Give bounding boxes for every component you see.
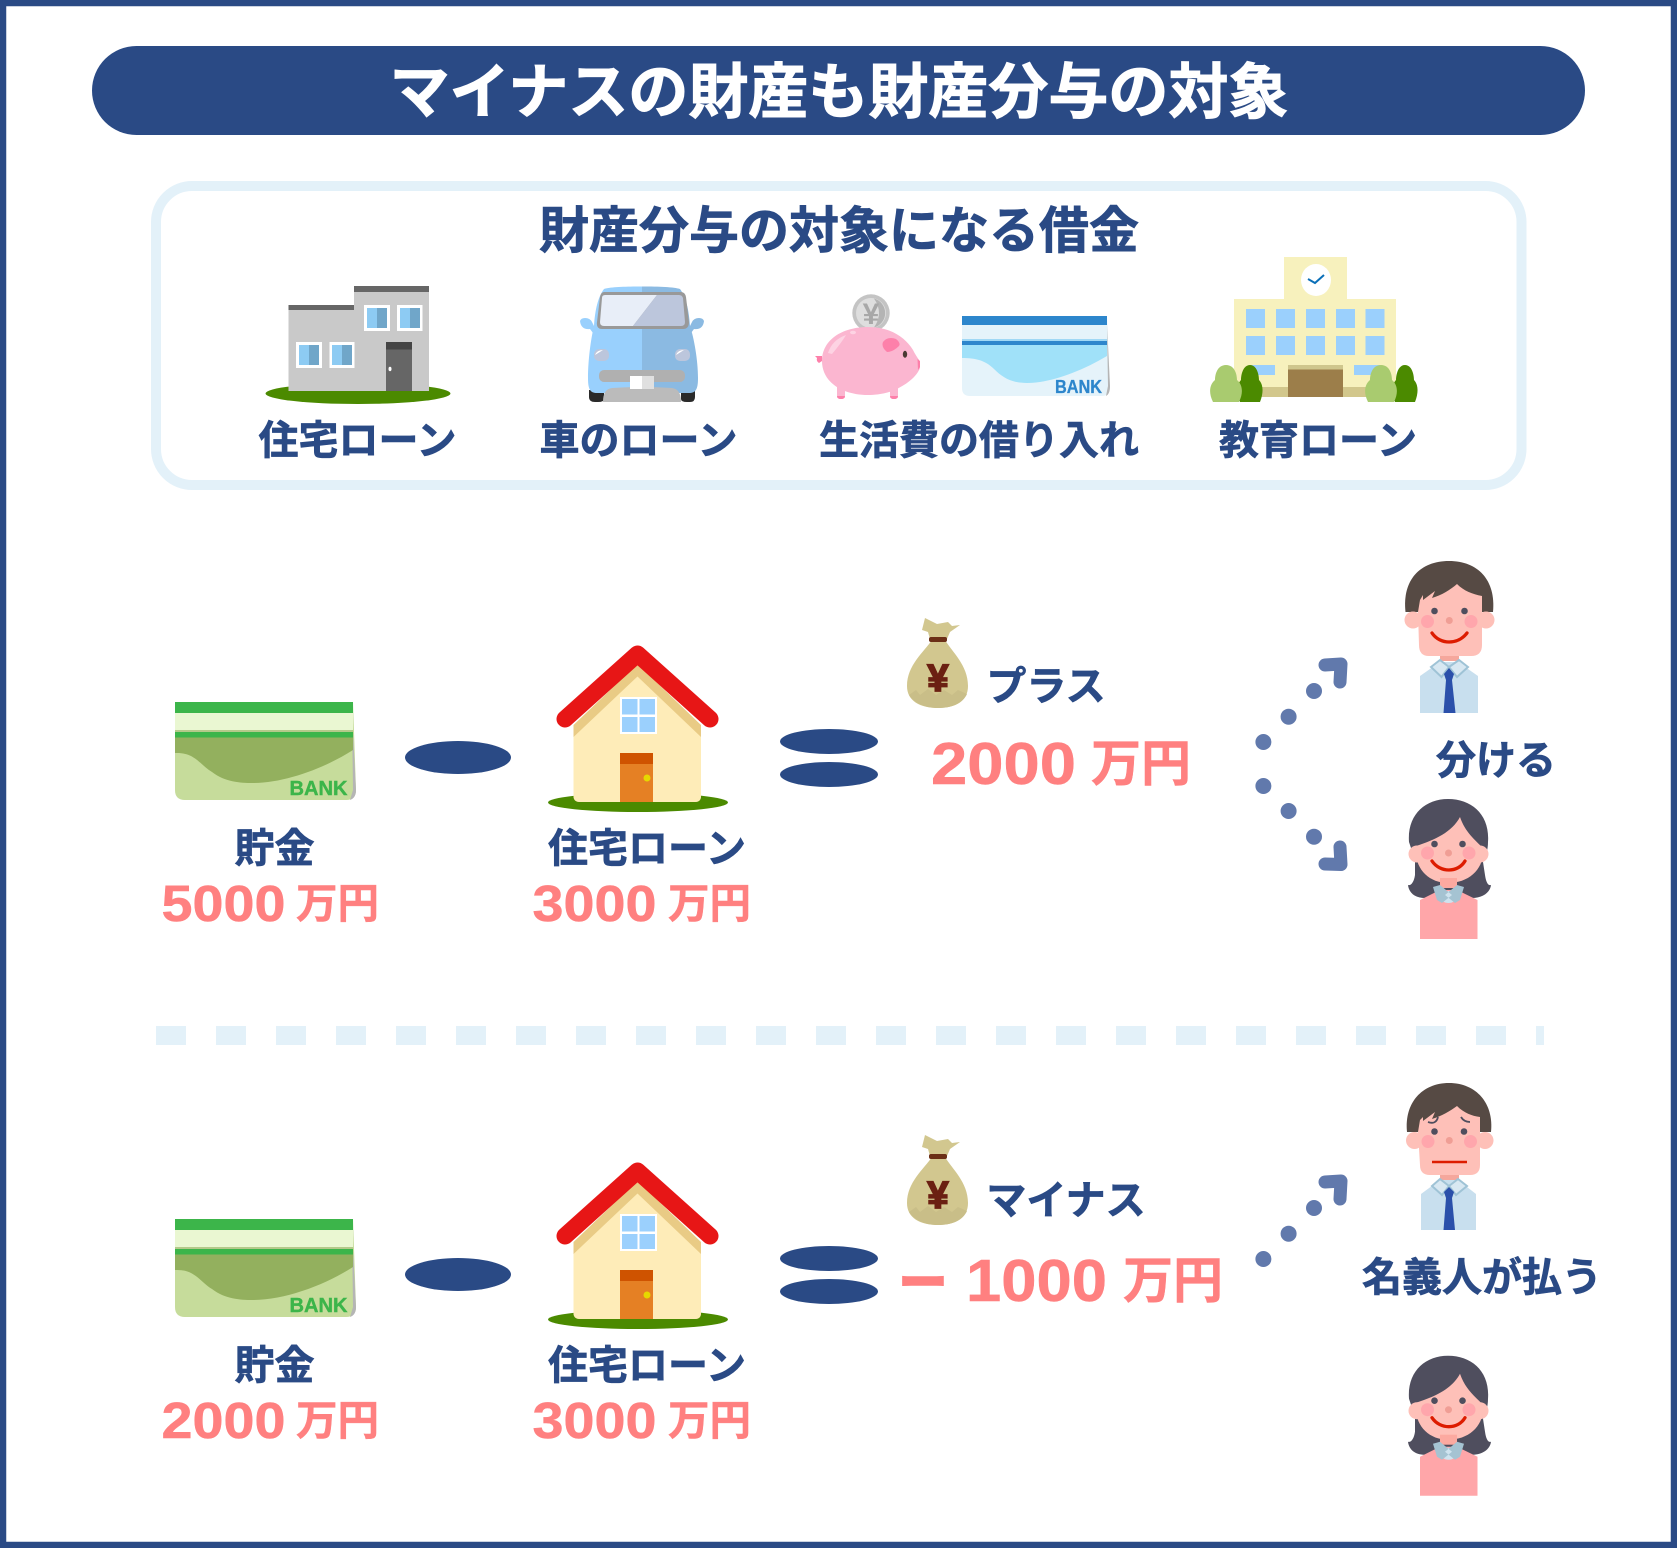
icon: school building [1210,257,1418,402]
label: savings: 貯金 [234,827,314,871]
amount: 3000: 3000 [532,875,656,932]
icon: red roof house [548,1171,728,1329]
amount: minus 1000: 1000 [966,1248,1107,1314]
amount: 2000: 万円 [1091,736,1191,792]
amount: minus 1000 [899,1248,1223,1314]
icon: money bag [907,1135,968,1225]
case 2 [162,1083,1602,1496]
amount: 2000: 万円 [296,1397,379,1444]
label: living expense loans: 生活費の借り入れ [819,419,1139,463]
arrow: dotted down [1255,778,1341,864]
label: minus: マイナス [986,1179,1146,1223]
amount: 3000 [532,875,751,932]
icon: smiling man [1404,561,1494,713]
icon: smiling woman [1408,799,1491,939]
icon: savings bankbook [175,702,356,800]
amount: 3000: 3000 [532,1392,656,1449]
arrow: dotted up [1255,1181,1341,1267]
icon: smiling woman [1408,1356,1491,1496]
section divider [156,1026,1544,1045]
icon: money bag [907,618,968,708]
minus sign [405,741,511,774]
title banner [92,46,1585,135]
label: housing loan: 住宅ローン [258,419,456,463]
label: housing loan: 住宅ローン [548,1344,746,1388]
icon: savings bankbook [175,1219,356,1317]
amount: minus 1000: ー [899,1257,947,1310]
label: car loan: 車のローン [540,419,738,463]
icon: blue bankbook [962,316,1110,397]
amount: 5000: 万円 [296,880,379,927]
icon: piggy bank and coin [815,294,920,399]
equals sign [780,1246,878,1304]
icon: piggy bank and coin: ¥ [863,298,880,331]
amount: 3000: 万円 [668,880,751,927]
amount: 3000 [532,1392,751,1449]
equals sign [780,729,878,787]
label: education loan: 教育ローン [1219,419,1417,463]
amount: 2000: 2000 [162,1392,286,1449]
icon: worried man [1406,1083,1494,1230]
icon: blue bankbook: BANK [1055,377,1102,397]
panel: debts subject to division [156,186,1522,485]
case 1 [162,561,1556,939]
icon: blue car [580,286,704,402]
amount: 5000 [162,875,379,932]
title text: マイナスの財産も財産分与の対象 [390,59,1288,126]
label: title holder pays: 名義人が払う [1362,1256,1602,1300]
icon: red roof house [548,654,728,812]
icon: gray modern house [266,286,450,404]
label: housing loan: 住宅ローン [548,827,746,871]
amount: 2000 [162,1392,379,1449]
amount: 5000: 5000 [162,875,286,932]
amount: minus 1000: 万円 [1123,1253,1223,1309]
minus sign [405,1258,511,1291]
amount: 3000: 万円 [668,1397,751,1444]
amount: 2000 [931,731,1191,797]
panel heading: 財産分与の対象になる借金 [539,203,1139,259]
arrow: dotted up [1255,664,1341,750]
amount: 2000: 2000 [931,731,1076,797]
label: plus: プラス [986,665,1106,709]
label: divide: 分ける [1436,739,1556,783]
label: savings: 貯金 [234,1344,314,1388]
